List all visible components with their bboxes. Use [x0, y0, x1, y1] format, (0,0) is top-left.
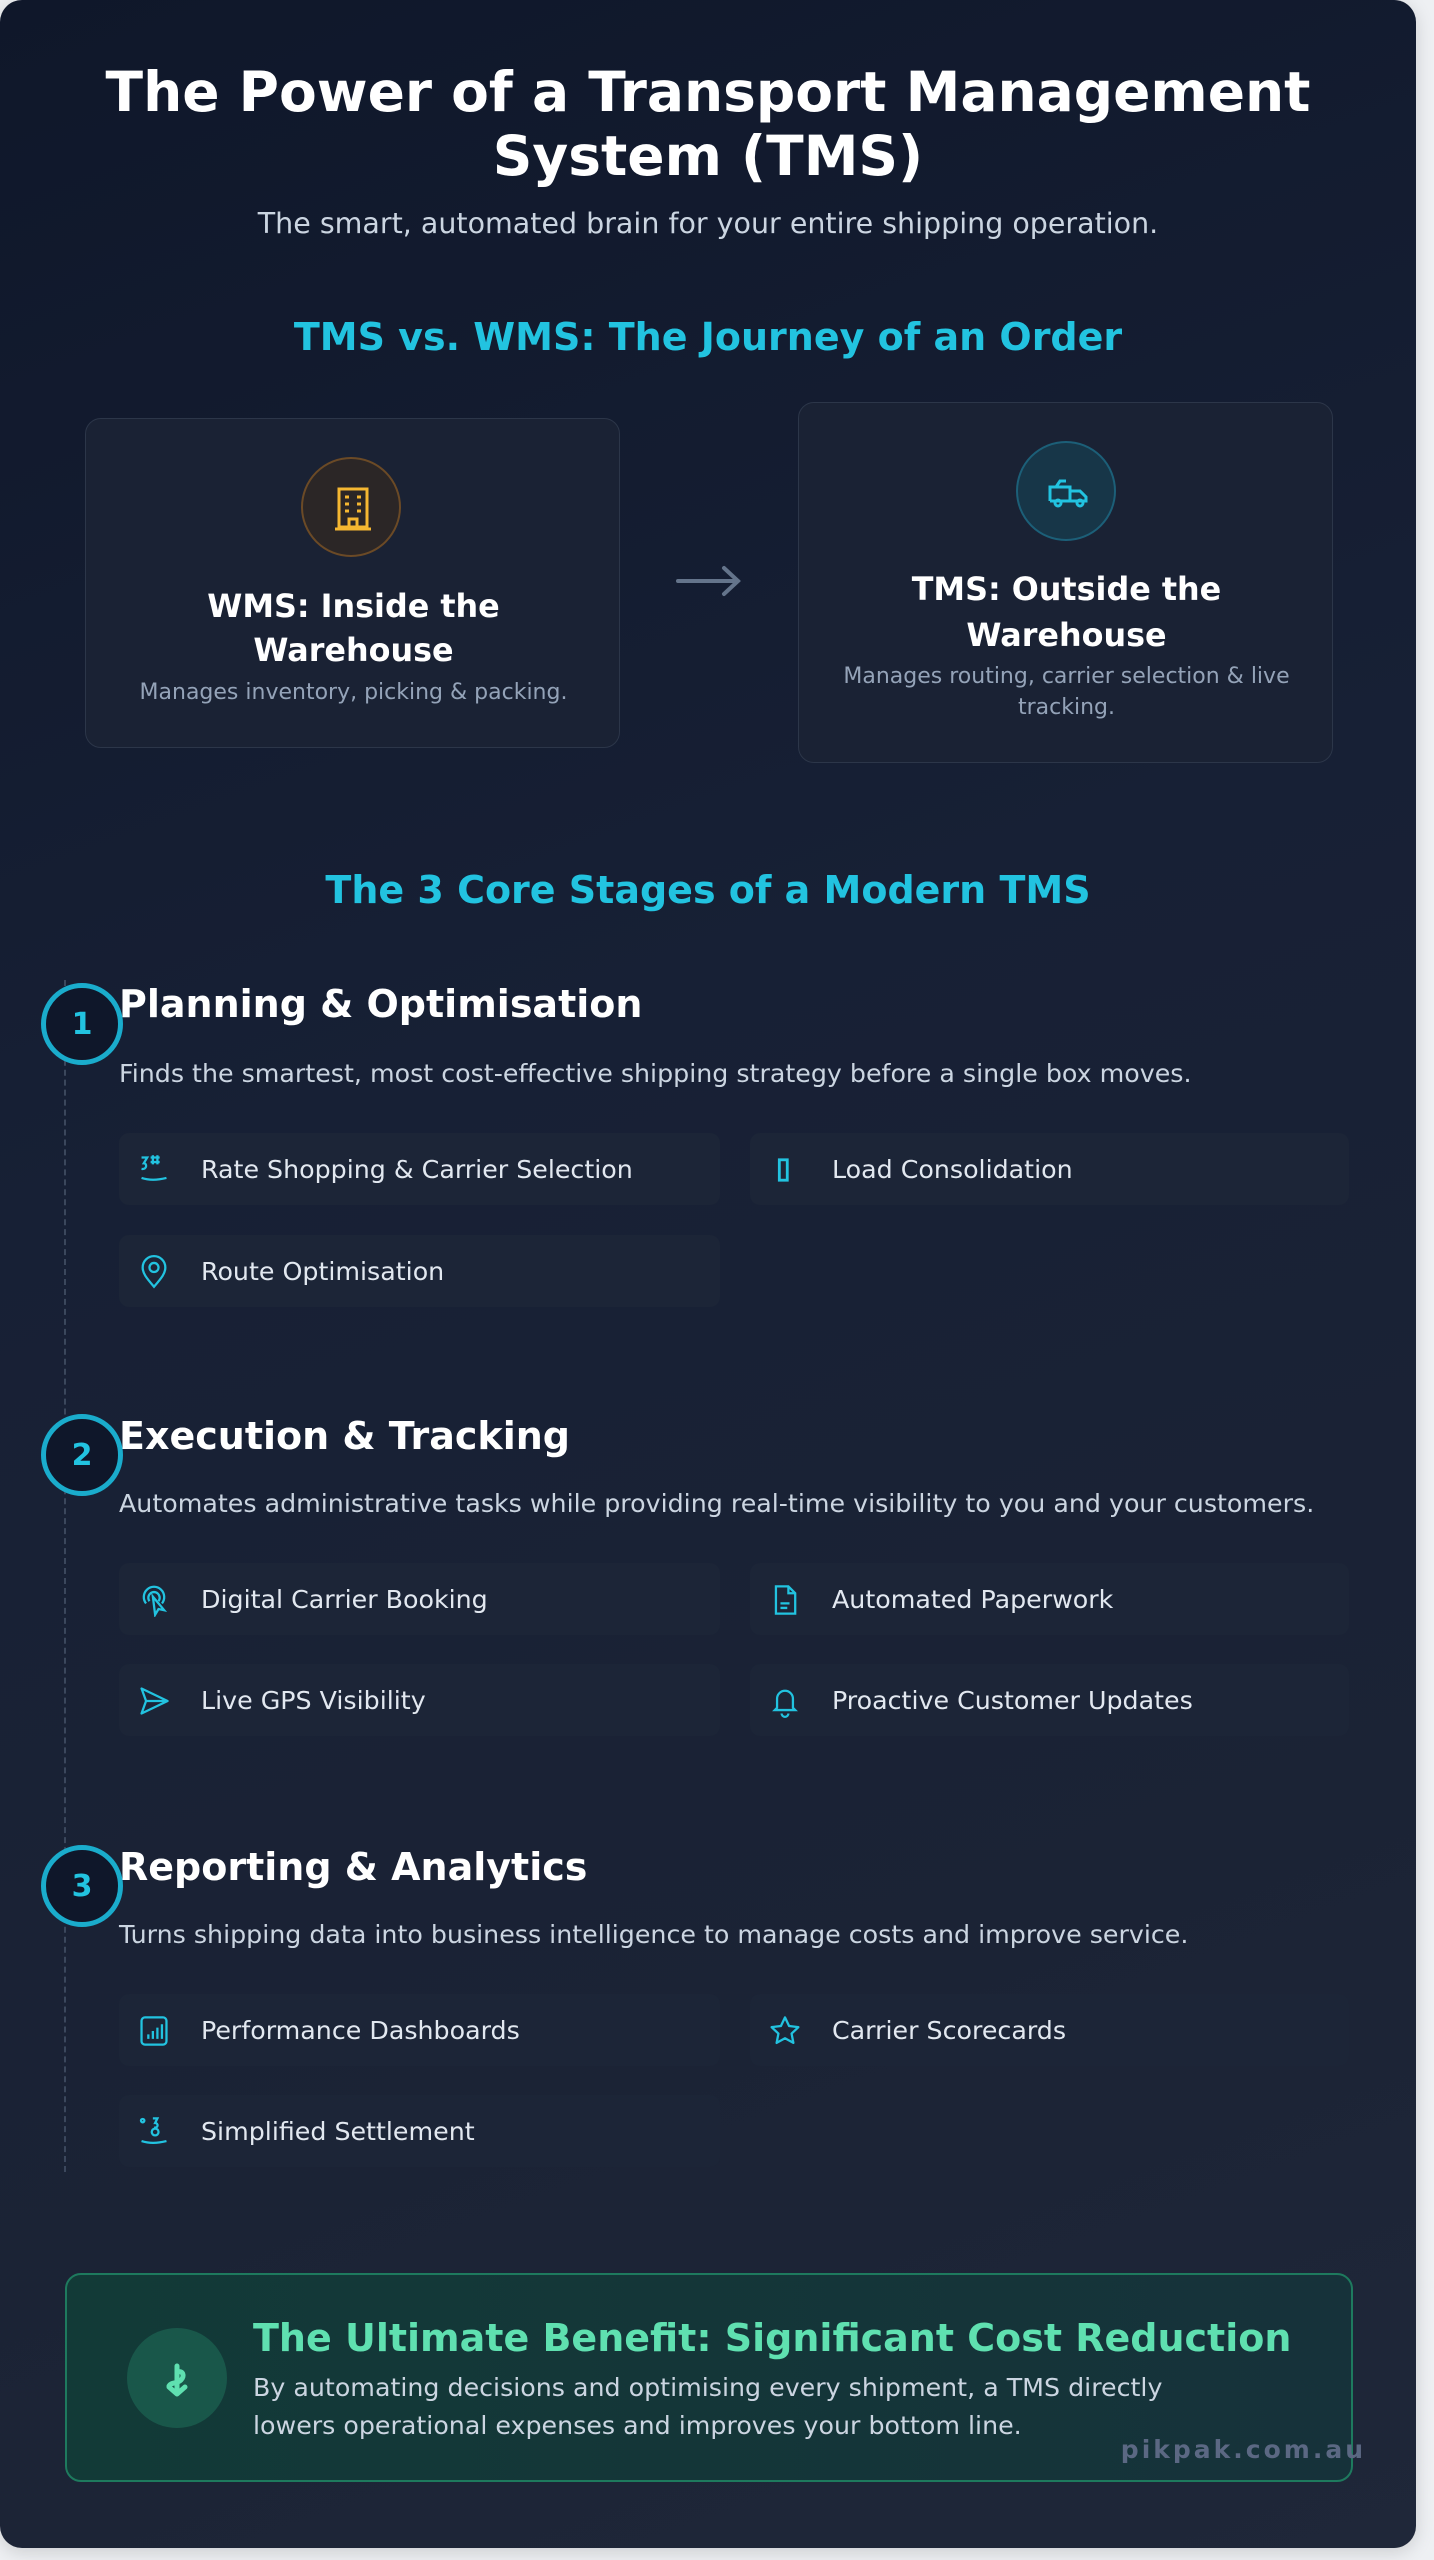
stage 1: [41, 982, 1192, 1288]
feature: automated paperwork: Automated Paperwork: [832, 1584, 1113, 1614]
feature: digital carrier booking: [119, 1563, 720, 1635]
TMS heading: TMS: Outside the: [912, 571, 1221, 608]
feature: scorecards: [750, 1994, 1349, 2066]
feature: load consolidation: [750, 1133, 1349, 1205]
feature: live GPS: [119, 1664, 720, 1736]
panel: WMS: [85, 418, 620, 748]
stage 3 title: Reporting & Analytics: [119, 1845, 587, 1889]
panel: TMS: [798, 402, 1333, 763]
feature: dashboards: Performance Dashboards: [201, 2016, 520, 2044]
step number 2: 2: [72, 1438, 92, 1472]
title: [106, 60, 1310, 188]
stage 2 title: Execution & Tracking: [119, 1414, 570, 1458]
step number 1: 1: [72, 1006, 92, 1042]
TMS heading: Warehouse: [966, 617, 1167, 654]
step number 1: [41, 983, 123, 1065]
title: System (TMS): [493, 124, 923, 188]
feature: rate shopping: [119, 1133, 720, 1205]
WMS description: Manages inventory, picking & packing.: [140, 680, 567, 705]
callout title: The Ultimate Benefit: Significant Cost Reduction: [253, 2316, 1291, 2360]
WMS heading: WMS: Inside the: [207, 588, 500, 625]
feature: proactive updates: Proactive Customer Updates: [832, 1686, 1193, 1714]
icon: cost down: [127, 2328, 227, 2428]
arrow: [676, 566, 741, 596]
feature: dashboards: [119, 1994, 720, 2066]
feature: settlement: [119, 2095, 720, 2167]
feature: route optimisation: Route Optimisation: [201, 1256, 444, 1286]
timeline dashed line: [64, 980, 66, 2172]
feature: settlement: Simplified Settlement: [201, 2116, 475, 2146]
callout: ultimate benefit: [65, 2273, 1353, 2482]
stage 1 title: Planning & Optimisation: [119, 982, 642, 1026]
feature: rate shopping: Rate Shopping & Carrier Selection: [201, 1154, 633, 1184]
icon: building: [301, 457, 401, 557]
WMS heading: Warehouse: [253, 632, 454, 669]
feature: scorecards: Carrier Scorecards: [832, 2016, 1066, 2044]
step number 2: [41, 1414, 123, 1496]
stage 3 description: Turns shipping data into business intelligence to manage costs and improve service.: [119, 1920, 1188, 1949]
feature: proactive updates: [750, 1664, 1349, 1736]
stage 1 description: Finds the smartest, most cost-effective shipping strategy before a single box moves.: [119, 1059, 1192, 1088]
footer brand: pikpak.com.au: [1121, 2435, 1366, 2464]
feature: live GPS: Live GPS Visibility: [201, 1686, 426, 1714]
step number 3: [41, 1845, 123, 1927]
stage 2 description: Automates administrative tasks while providing real-time visibility to you and your customers.: [119, 1489, 1314, 1518]
callout description: By automating decisions and optimising every shipment, a TMS directly lowers operational expenses and improves your bottom line.: [253, 2373, 1162, 2440]
TMS heading: [912, 571, 1221, 654]
WMS heading: [207, 588, 500, 669]
section heading: 3 core stages: The 3 Core Stages of a Modern TMS: [325, 868, 1091, 912]
subtitle: The smart, automated brain for your entire shipping operation.: [258, 207, 1158, 240]
feature: digital carrier booking: Digital Carrier Booking: [201, 1584, 488, 1614]
icon: truck: [1016, 441, 1116, 541]
step number 3: 3: [72, 1868, 92, 1904]
feature: route optimisation: [119, 1235, 720, 1307]
TMS description: Manages routing, carrier selection & live tracking.: [843, 664, 1290, 720]
section heading: TMS vs WMS: TMS vs. WMS: The Journey of an Order: [294, 315, 1122, 359]
feature: load consolidation: Load Consolidation: [832, 1154, 1073, 1184]
stage 3: [41, 1845, 1188, 2146]
stage 2: [41, 1414, 1314, 1718]
feature: automated paperwork: [750, 1563, 1349, 1635]
title: The Power of a Transport Management: [106, 60, 1310, 124]
